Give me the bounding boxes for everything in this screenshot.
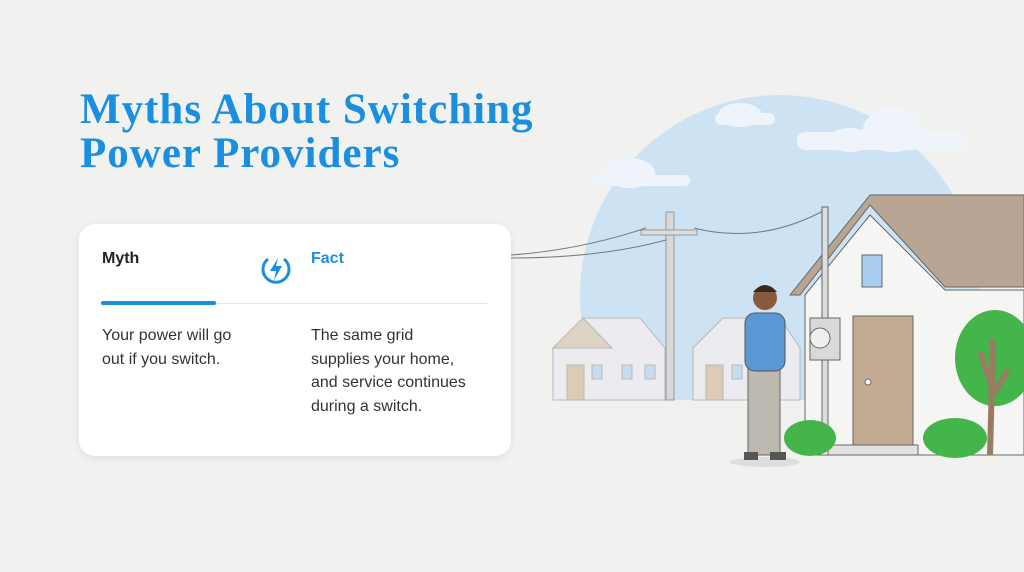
text: fact: during a switch. xyxy=(311,398,422,414)
sky circle xyxy=(580,95,980,495)
heading: fact: Fact xyxy=(311,250,344,267)
text: fact: supplies your home, xyxy=(311,350,454,368)
ground xyxy=(540,400,1024,572)
text: myth: Your power will go xyxy=(102,327,231,344)
main house xyxy=(790,195,1024,455)
tree and bushes xyxy=(784,310,1024,458)
text: fact: The same grid xyxy=(311,327,413,344)
text: myth: out if you switch. xyxy=(102,350,220,368)
text: fact xyxy=(311,327,466,414)
title: Myths About Switching xyxy=(80,86,533,133)
title xyxy=(80,86,533,177)
tab underline xyxy=(101,303,487,304)
heading: myth: Myth xyxy=(102,250,139,267)
panel: myth vs fact card xyxy=(79,224,511,456)
icon: lightning bolt xyxy=(262,258,290,284)
text: myth xyxy=(102,327,231,368)
text: fact: and service continues xyxy=(311,374,466,391)
person xyxy=(730,285,800,467)
background houses xyxy=(553,318,800,400)
utility pole and wires xyxy=(511,210,825,400)
title: Power Providers xyxy=(80,130,400,177)
clouds xyxy=(592,103,967,188)
